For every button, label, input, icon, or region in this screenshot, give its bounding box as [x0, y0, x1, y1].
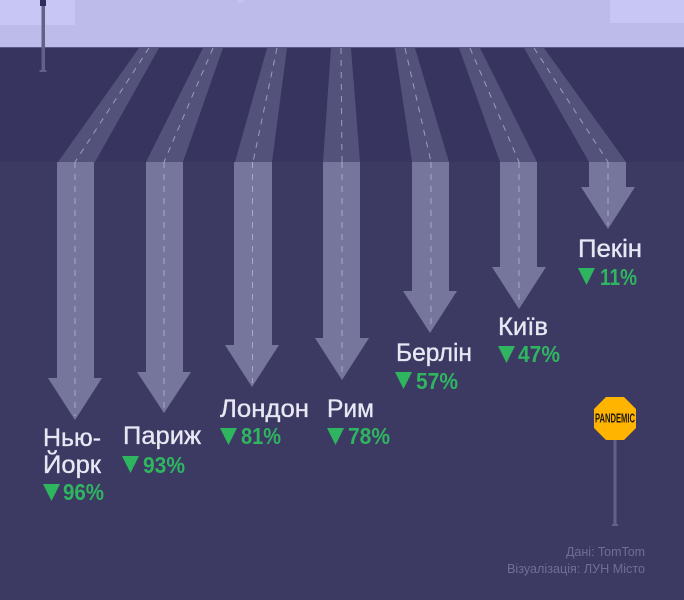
icon: pandemic stop sign: PANDEMIC [595, 410, 635, 426]
label: London 81% [220, 395, 309, 449]
label: Rome 78%: Рим [327, 395, 374, 423]
horizon band [0, 0, 684, 48]
label: Rome 78% [327, 395, 390, 449]
label: Beijing 11%: Пекін [578, 235, 642, 263]
label: New York 96%: Нью- [43, 424, 101, 452]
credits [507, 545, 645, 576]
label: London 81%: 81% [241, 423, 281, 449]
label: London 81%: Лондон [220, 395, 309, 423]
credits: Дані: TomTom [566, 545, 645, 559]
arrow: Kyiv [492, 162, 546, 309]
label: Berlin 57%: 57% [416, 368, 458, 394]
label: Rome 78%: 78% [348, 423, 390, 449]
icon: top sign post [40, 0, 46, 72]
credits: Візуалізація: ЛУН Місто [507, 562, 645, 576]
label: New York 96%: Йорк [43, 449, 102, 479]
label: Beijing 11%: 11% [600, 264, 637, 290]
label: New York 96%: 96% [63, 479, 104, 505]
background lower area [0, 162, 684, 600]
dark road surface [0, 47, 684, 162]
arrow: London [225, 162, 279, 387]
label: Kyiv 47% [498, 313, 560, 367]
arrow: Beijing [581, 162, 635, 229]
arrow: Berlin [403, 162, 457, 333]
label: Berlin 57%: Берлін [396, 339, 472, 367]
label: Paris 93% [122, 422, 201, 478]
arrow: Paris [137, 162, 191, 413]
arrow: Rome [315, 162, 369, 380]
perspective roads [58, 48, 626, 162]
label: Kyiv 47%: Київ [498, 313, 548, 341]
label: Paris 93%: Париж [123, 422, 201, 450]
label: Kyiv 47%: 47% [518, 341, 560, 367]
label: New York 96% [43, 424, 104, 505]
label: Beijing 11% [578, 235, 642, 290]
icon: pandemic stop sign [594, 397, 636, 526]
arrow: New York [48, 162, 102, 420]
label: Paris 93%: 93% [143, 452, 185, 478]
label: Berlin 57% [395, 339, 472, 394]
